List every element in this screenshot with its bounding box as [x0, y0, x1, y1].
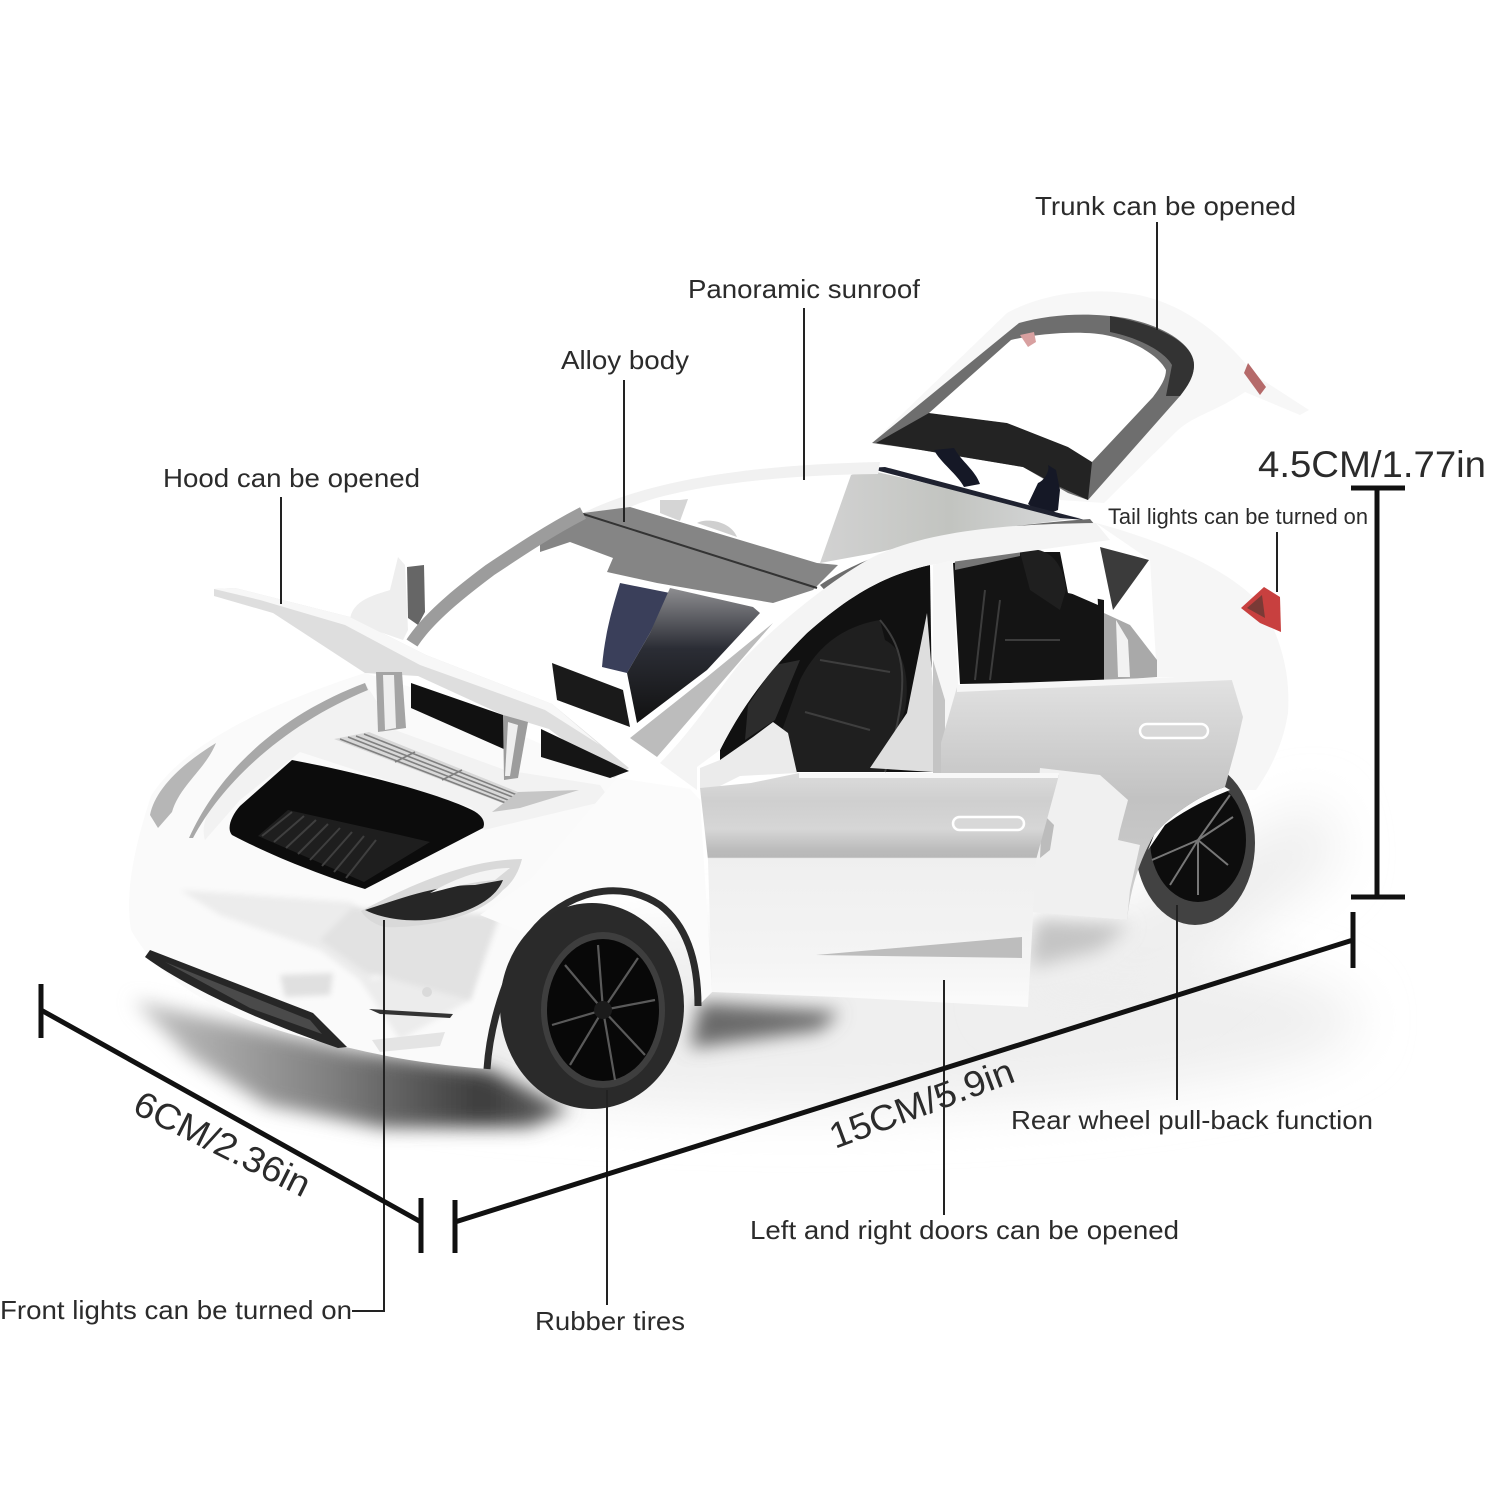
callout: trunk: Trunk can be opened — [1035, 191, 1296, 221]
front grille — [145, 950, 347, 1048]
dimension: length — [455, 912, 1353, 1253]
A pillar and roof arc — [660, 523, 1110, 790]
front fender edge — [480, 778, 712, 1006]
callout: front lights: Front lights can be turned on — [0, 1295, 352, 1325]
hood-side gray stripes — [150, 683, 368, 838]
hood struts — [376, 672, 528, 780]
callout: hood: Hood can be opened — [163, 463, 420, 493]
headlight — [361, 859, 522, 927]
bumper light strip — [369, 1009, 453, 1018]
dimension: width — [41, 984, 421, 1253]
bumper reflections — [180, 890, 500, 1052]
dimension: length: 15CM/5.9in — [823, 1050, 1020, 1156]
rear wheel — [1135, 761, 1255, 925]
tail light — [1241, 587, 1281, 632]
open rear door — [941, 675, 1243, 920]
main body shell — [129, 523, 1288, 1069]
front trunk — [230, 760, 484, 889]
dimension: width: 6CM/2.36in — [127, 1082, 318, 1205]
rear cabin opening — [953, 547, 1157, 684]
door sill gray — [933, 660, 945, 780]
under-hood dark bay — [411, 683, 629, 778]
side mirror — [700, 722, 797, 790]
callout: front lights — [0, 920, 384, 1325]
dimension: height — [1258, 444, 1486, 897]
left side mirror — [350, 557, 425, 640]
open front door — [700, 773, 1059, 1007]
trunk hinges — [934, 448, 1060, 516]
open trunk lid — [872, 291, 1309, 503]
cabin seats and front door opening — [720, 565, 933, 772]
callout: panoramic sunroof: Panoramic sunroof — [688, 274, 921, 304]
roof gray crossbar — [540, 507, 1095, 603]
front wheel — [487, 891, 698, 1109]
car illustration — [129, 291, 1309, 1109]
callout: rubber tires: Rubber tires — [535, 1306, 685, 1336]
ground shadow — [133, 800, 1360, 1128]
engine bay panel — [204, 683, 610, 840]
interior seen through windshield — [552, 583, 773, 757]
callout: doors: Left and right doors can be opened — [750, 1215, 1179, 1245]
callout: tail lights: Tail lights can be turned on — [1108, 504, 1368, 529]
panoramic glass roof — [583, 462, 1085, 563]
callout: alloy body: Alloy body — [561, 345, 689, 375]
callout: rear wheel: Rear wheel pull-back function — [1011, 1105, 1373, 1135]
open hood — [214, 588, 629, 778]
left windshield pillar — [412, 513, 583, 643]
dimension: height: 4.5CM/1.77in — [1258, 444, 1486, 485]
B pillar — [933, 560, 966, 780]
